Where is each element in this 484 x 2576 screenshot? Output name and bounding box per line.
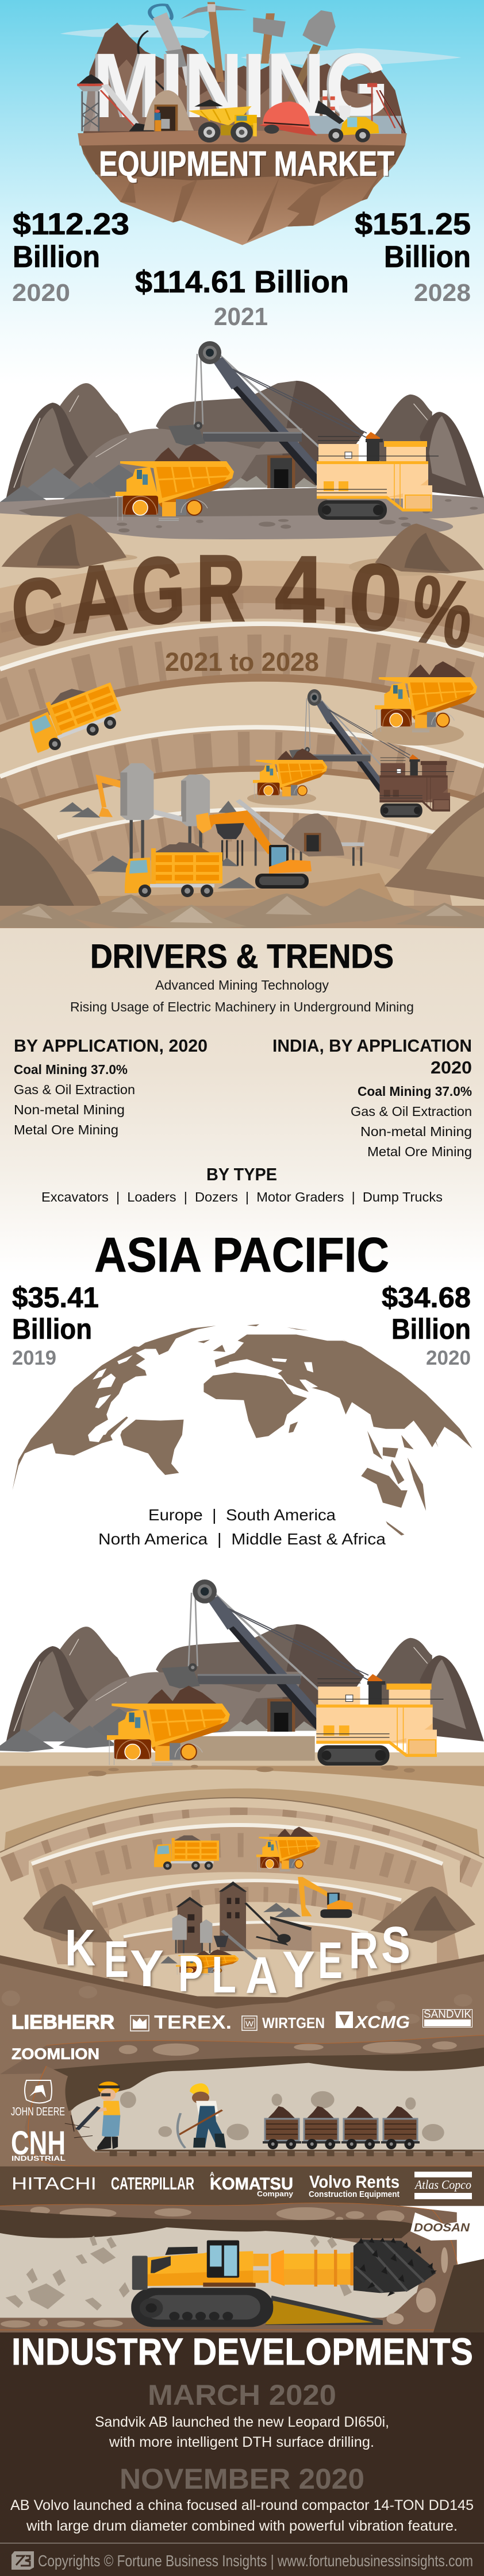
stat: 2019 Asia Pacific: Billion xyxy=(12,1313,92,1345)
stat: 2019 Asia Pacific xyxy=(12,1281,99,1369)
heading: KEY PLAYERS: Y xyxy=(282,1941,315,1999)
logo: Atlas Copco: Atlas Copco xyxy=(414,2177,471,2192)
heading: CAGR 4.0%: . xyxy=(332,537,349,643)
heading: Asia Pacific: ASIA PACIFIC xyxy=(94,1228,389,1283)
heading: KEY PLAYERS: P xyxy=(178,1945,203,2003)
icon: yellow dump truck xyxy=(189,99,257,142)
icon: rope shovel xyxy=(162,1579,443,1766)
text: other regions: Europe | South America xyxy=(148,1506,336,1524)
map: world globe xyxy=(12,1324,473,1535)
logo: Komatsu: KOMATSU xyxy=(210,2175,293,2193)
icon: pit dump truck middle xyxy=(247,748,327,805)
stat: 2020 Asia Pacific xyxy=(382,1281,471,1369)
stat: 2019 Asia Pacific: 2019 xyxy=(12,1347,56,1369)
heading: CAGR 4.0%: G xyxy=(129,536,187,644)
icon: pit dump truck right xyxy=(372,661,477,746)
icon: main pit excavator xyxy=(196,810,312,889)
panel: India by application: Gas & Oil Extraction xyxy=(351,1104,472,1119)
logo: Volvo Rents: Volvo Rents xyxy=(309,2172,400,2192)
floating island xyxy=(78,131,407,245)
logo: Sandvik: SANDVIK xyxy=(424,2009,471,2021)
panel: drivers background xyxy=(0,928,484,1273)
panel: by application: Non-metal Mining xyxy=(14,1102,125,1117)
panel: India by application: INDIA, BY APPLICATION xyxy=(272,1036,472,1056)
stat: 2028 market size xyxy=(355,207,471,307)
panel: by application: Metal Ore Mining xyxy=(14,1122,118,1137)
logo: Caterpillar: CATERPILLAR xyxy=(111,2173,194,2193)
icon: miner with jackhammer xyxy=(77,2081,120,2150)
icon: small truck in pit xyxy=(176,1949,239,1975)
title: MINING: MINING xyxy=(93,34,389,137)
text: drivers list xyxy=(70,978,414,1014)
icon: red helmet xyxy=(259,102,317,136)
logo: Doosan: DOOSAN xyxy=(414,2222,470,2234)
heading: KEY PLAYERS: R xyxy=(349,1922,378,1980)
logo: Terex xyxy=(130,2011,232,2033)
stat: 2019 Asia Pacific: $35.41 xyxy=(12,1281,99,1314)
development: March 2020: Sandvik AB launched the new Leopard DI650i, xyxy=(95,2414,389,2430)
boulders at pit rim xyxy=(2,513,484,576)
panel: lower tunnel xyxy=(0,2171,484,2336)
heading: KEY PLAYERS: A xyxy=(245,1947,278,2005)
footer: copyright xyxy=(11,2551,473,2570)
logo: John Deere: JOHN DEERE xyxy=(11,2106,65,2118)
stat: 2021 market size xyxy=(135,265,349,331)
stat: 2020 Asia Pacific: Billion xyxy=(391,1313,471,1345)
stat: 2020 market size: Billion xyxy=(13,240,100,274)
heading: drivers and trends: DRIVERS & TRENDS xyxy=(90,938,394,975)
development: November 2020: NOVEMBER 2020 xyxy=(120,2463,364,2495)
logo: CNH Industrial: CNH xyxy=(11,2125,66,2162)
logo: Liebherr: LIEBHERR xyxy=(11,2011,114,2033)
stat: 2020 Asia Pacific: $34.68 xyxy=(382,1281,471,1314)
panel: by application: Coal Mining 37.0% xyxy=(14,1062,128,1077)
text: other regions xyxy=(98,1506,386,1548)
heading: KEY PLAYERS: L xyxy=(212,1947,236,2004)
text: drivers list: Advanced Mining Technology xyxy=(155,978,329,992)
icon: dump truck xyxy=(116,444,234,520)
logo: John Deere xyxy=(11,2080,65,2118)
title: MINING: MINING xyxy=(90,34,387,137)
development: November 2020 xyxy=(10,2463,474,2534)
logo: Wirtgen: WIRTGEN xyxy=(262,2014,325,2032)
icon: tunnel boring machine xyxy=(131,2238,437,2327)
heading: CAGR 4.0%: 4 xyxy=(275,536,324,642)
logo: Wirtgen xyxy=(242,2014,325,2032)
development: November 2020: with large drum diameter combined with powerful vibration feature. xyxy=(26,2518,458,2534)
logo: Hitachi: HITACHI xyxy=(11,2173,97,2193)
icon: factory and headframe xyxy=(309,83,405,134)
logo: Komatsu: Company xyxy=(257,2189,294,2198)
heading: KEY PLAYERS: E xyxy=(104,1931,129,1988)
heading: CAGR 4.0%: R xyxy=(196,535,245,641)
heading: KEY PLAYERS: Y xyxy=(130,1940,164,1998)
panel: by type: BY TYPE xyxy=(206,1164,277,1184)
icon: dump truck xyxy=(107,1686,230,1765)
panel: by application xyxy=(14,1036,208,1137)
panel: industry developments background xyxy=(0,2332,484,2576)
stat: 2020 market size: $112.23 xyxy=(13,207,129,241)
stat: 2028 market size: 2028 xyxy=(414,279,471,307)
text: 2021 to 2028: 2021 to 2028 xyxy=(165,647,319,677)
panel: header illustration xyxy=(60,2,462,245)
mine road xyxy=(0,488,484,539)
logo: Wirtgen: W xyxy=(245,2019,254,2028)
panel: India by application: 2020 xyxy=(431,1057,472,1077)
logo: Terex: TEREX. xyxy=(154,2011,232,2033)
heading: CAGR 4.0%: A xyxy=(66,544,130,653)
logo: XCMG: XCMG xyxy=(354,2012,410,2032)
mine ground xyxy=(0,1736,484,1790)
stat: 2020 market size: 2020 xyxy=(12,279,70,307)
panel: by application: Gas & Oil Extraction xyxy=(14,1082,135,1097)
title: EQUIPMENT MARKET: EQUIPMENT MARKET xyxy=(100,145,395,184)
heading: KEY PLAYERS: K xyxy=(65,1920,95,1977)
icon: miner with pickaxe xyxy=(178,2083,226,2148)
panel: India by application: Metal Ore Mining xyxy=(367,1144,472,1159)
logo: Volvo Rents: Construction Equipment xyxy=(309,2189,400,2199)
logo: Atlas Copco xyxy=(414,2172,472,2199)
icon: small excavator and gravel xyxy=(59,774,120,817)
heading: CAGR 4.0% xyxy=(6,535,479,668)
heading: CAGR 4.0%: 0 xyxy=(346,543,405,651)
heading: CAGR 4.0%: C xyxy=(6,557,70,667)
logos: key players second row xyxy=(11,2171,473,2241)
panel: underground mine xyxy=(0,1954,484,2183)
stat: 2020 Asia Pacific: 2020 xyxy=(426,1347,471,1369)
icon: pit dump truck xyxy=(256,1827,320,1871)
logo: CNH Industrial: INDUSTRIAL xyxy=(11,2154,66,2162)
icon: silos and conveyor xyxy=(91,763,364,889)
icon: pit road truck xyxy=(154,1835,219,1870)
stat: 2021 market size: 2021 xyxy=(214,303,268,331)
development: March 2020 xyxy=(95,2379,389,2450)
development: March 2020: with more intelligent DTH surface drilling. xyxy=(109,2434,374,2450)
icon: mine entrance with worker xyxy=(144,90,194,131)
icon: mining tools xyxy=(138,2,336,101)
panel: by type: Excavators | Loaders | Dozers | Motor Graders | Dump Trucks xyxy=(41,1189,443,1204)
stat: 2021 market size: $114.61 Billion xyxy=(135,265,349,299)
pit terraces xyxy=(0,1789,484,2010)
mountains behind title xyxy=(83,22,406,133)
logos: key players first row xyxy=(11,2009,473,2162)
icon: main pit road truck xyxy=(125,844,222,897)
panel: open pit mine scene xyxy=(0,341,484,942)
icon: pit shovel xyxy=(289,689,454,817)
panel: by type xyxy=(41,1164,443,1204)
development: March 2020: MARCH 2020 xyxy=(148,2379,336,2411)
icon: tilted road truck xyxy=(21,675,126,756)
logo: Komatsu xyxy=(210,2171,294,2198)
pit hills and mounds xyxy=(0,792,484,930)
icon: Fortune Business Insights logo xyxy=(11,2551,34,2570)
development: November 2020: AB Volvo launched a china focused all-round compactor 14-TON DD145 xyxy=(10,2497,474,2513)
mountains and gravel xyxy=(0,381,484,508)
logo: Komatsu: A xyxy=(210,2171,214,2178)
stat: 2028 market size: $151.25 xyxy=(355,207,471,241)
panel: by application: BY APPLICATION, 2020 xyxy=(14,1036,208,1056)
icon: wheel loader xyxy=(315,101,379,142)
stat: 2020 market size xyxy=(12,207,129,307)
logo: Volvo Rents xyxy=(309,2172,400,2199)
panel: second mine scene xyxy=(0,1579,484,2017)
pit terraces xyxy=(0,561,484,942)
icon: coal conveyor tower xyxy=(77,74,154,131)
panel: India by application: Coal Mining 37.0% xyxy=(358,1084,472,1099)
panel: India by application xyxy=(272,1036,472,1159)
logo: Doosan xyxy=(410,2212,473,2241)
heading: KEY PLAYERS xyxy=(65,1917,410,2005)
stat: 2028 market size: Billion xyxy=(384,240,471,274)
logo: Zoomlion: ZOOMLION xyxy=(11,2045,99,2063)
text: other regions: North America | Middle East & Africa xyxy=(98,1530,386,1548)
mountains and gravel xyxy=(0,1624,484,1752)
icon: ore carts xyxy=(263,2106,420,2149)
pit hills and structures xyxy=(23,1877,475,1963)
text: drivers list: Rising Usage of Electric Machinery in Underground Mining xyxy=(70,999,414,1014)
panel: sky background xyxy=(0,0,484,385)
heading: KEY PLAYERS: E xyxy=(318,1932,343,1990)
title: EQUIPMENT MARKET: EQUIPMENT MARKET xyxy=(99,144,394,183)
heading: KEY PLAYERS: S xyxy=(381,1917,410,1974)
icon: rope shovel xyxy=(168,341,439,520)
clouds xyxy=(60,25,462,67)
logo: Sandvik xyxy=(423,2009,473,2027)
panel: India by application: Non-metal Mining xyxy=(360,1124,472,1139)
